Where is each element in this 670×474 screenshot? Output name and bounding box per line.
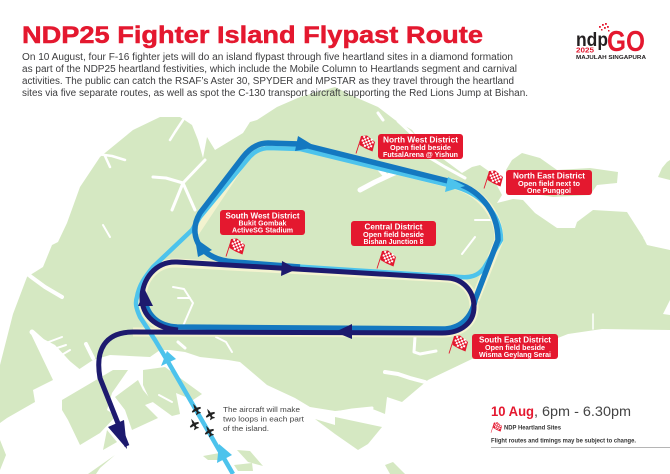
label: North East District: North East District — [513, 172, 585, 180]
callout: two loops: two loops in each part — [223, 414, 305, 424]
intro text: as part of the NDP25 heartland festivities, which include the Mobile Column to Heartlands segment and carnival — [22, 64, 517, 75]
disclaimer: Flight routes and timings may be subject to change. — [491, 438, 636, 444]
flag: South West — [226, 238, 245, 256]
arrow: navy right — [281, 261, 297, 276]
arrow: navy left — [335, 324, 352, 339]
date and time: 10 Aug — [491, 403, 534, 419]
arrowheads — [108, 136, 465, 463]
arrow: mid blue top — [295, 136, 316, 151]
label: North East District: One Punggol — [527, 188, 571, 195]
Jurong Island group — [0, 367, 405, 474]
callout: two loops — [223, 405, 305, 433]
callout: two loops: The aircraft will make — [223, 405, 300, 414]
flag: Central — [377, 250, 396, 268]
title: NDP25 Fighter Island Flypast Route — [22, 22, 483, 49]
arrow: light blue north east — [445, 177, 465, 192]
label: North West District: Open field beside — [390, 145, 451, 152]
label: North West District — [378, 134, 463, 159]
Pulau Tekong — [658, 160, 670, 180]
date and time — [491, 403, 631, 419]
legend: NDP Heartland Sites — [491, 422, 561, 433]
navy route — [99, 262, 474, 446]
label: South West District: ActiveSG Stadium — [232, 228, 293, 234]
logo: NDP GO 2025: MAJULAH SINGAPURA — [576, 55, 646, 61]
logo: NDP GO 2025 — [576, 23, 646, 61]
logo: NDP GO 2025: 2025 — [576, 48, 594, 54]
label: North West District: FutsalArena @ Yishun — [383, 152, 458, 159]
label: South East District: South East District — [479, 336, 551, 344]
intro text: activities. The public can catch the RSAF’s Aster 30, SPYDER and MPSTAR as they travel through the heartland — [22, 76, 514, 87]
label: Central District: Open field beside — [363, 232, 424, 239]
icon: four F-16 jets in diamond formation — [187, 401, 217, 438]
flag: North West — [356, 136, 375, 154]
label: South East District: Wisma Geylang Serai — [479, 352, 551, 359]
intro text: On 10 August, four F-16 fighter jets will do an island flypast through five heartland sites in a diamond formation — [22, 52, 513, 63]
arrow: navy up — [138, 290, 153, 306]
callout: two loops: of the island. — [223, 424, 269, 433]
Pulau Ubin — [506, 153, 618, 197]
light blue route — [136, 148, 501, 474]
arrow: navy large exit — [108, 420, 127, 449]
main island landmass — [0, 87, 670, 423]
logo: NDP GO 2025: ndp — [576, 30, 608, 51]
label: North East District — [506, 170, 592, 195]
logo: NDP GO 2025: GO — [607, 26, 645, 58]
label: South West District — [220, 210, 305, 235]
rivers and reservoirs — [30, 113, 670, 413]
mid blue route — [145, 143, 498, 329]
label: Central District: Central District — [364, 222, 423, 232]
flag: North East — [484, 170, 503, 188]
label: South East District — [472, 334, 558, 359]
intro text — [22, 52, 528, 99]
date and time: , 6pm - 6.30pm — [534, 403, 631, 419]
label: South West District: Bukit Gombak — [238, 220, 287, 228]
label: South West District: South West District — [226, 212, 300, 220]
flight routes — [99, 136, 501, 474]
intro text: sites via five separate routes, as well as spot the C-130 transport aircraft supporting the Red Lions Jump at Bishan. — [22, 88, 528, 99]
arrow: light blue up — [161, 351, 176, 366]
label: North West District: North West District — [383, 136, 458, 144]
label: Central District — [351, 221, 436, 246]
arrow: light blue entry — [217, 444, 232, 463]
legend: NDP Heartland Sites: NDP Heartland Sites — [504, 424, 561, 432]
flag: South East — [449, 336, 468, 354]
label: South East District: Open field beside — [485, 345, 545, 352]
arrow: mid blue left — [195, 238, 212, 257]
label: North East District: Open field next to — [518, 181, 580, 188]
route halo — [133, 145, 499, 333]
label: Central District: Bishan Junction 8 — [364, 239, 424, 246]
